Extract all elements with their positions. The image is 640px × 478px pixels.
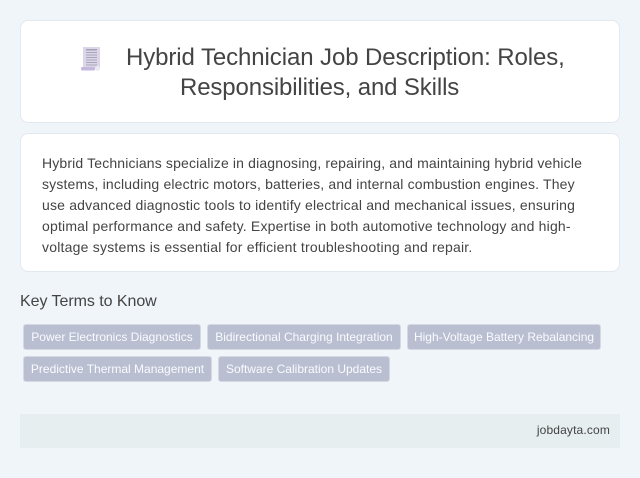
tag: software calibration updates: Software Calibration Updates (226, 362, 382, 376)
tag: software calibration updates (218, 356, 390, 382)
description panel (20, 133, 620, 272)
tag: predictive thermal management: Predictive Thermal Management (31, 362, 204, 376)
footer source: jobdayta.com (537, 423, 610, 437)
description text: voltage systems is essential for efficient troubleshooting and repair. (42, 239, 472, 255)
tag: high-voltage battery rebalancing: High-Voltage Battery Rebalancing (414, 330, 594, 344)
header panel (20, 20, 620, 123)
tag: bidirectional charging integration (207, 324, 401, 350)
description text: optimal performance and safety. Expertise in both automotive technology and high- (42, 218, 571, 234)
key terms heading: Key Terms to Know (20, 293, 157, 310)
icon: document scroll (81, 47, 100, 71)
tag: high-voltage battery rebalancing (407, 324, 601, 350)
description text: use advanced diagnostic tools to identify electrical and mechanical issues, ensuring (42, 197, 575, 213)
tag: power electronics diagnostics (23, 324, 201, 350)
description text (42, 155, 582, 255)
title: Hybrid Technician Job Description: Roles, (126, 44, 565, 71)
tag: predictive thermal management (23, 356, 212, 382)
key terms tags (23, 324, 601, 382)
title: Responsibilities, and Skills (180, 74, 459, 101)
footer bar (20, 414, 620, 448)
description text: systems, including electric motors, batteries, and internal combustion engines. They (42, 176, 575, 192)
title (126, 44, 565, 101)
tag: bidirectional charging integration: Bidirectional Charging Integration (215, 330, 393, 344)
description text: Hybrid Technicians specialize in diagnosing, repairing, and maintaining hybrid vehicle (42, 155, 582, 171)
tag: power electronics diagnostics: Power Electronics Diagnostics (31, 330, 193, 344)
